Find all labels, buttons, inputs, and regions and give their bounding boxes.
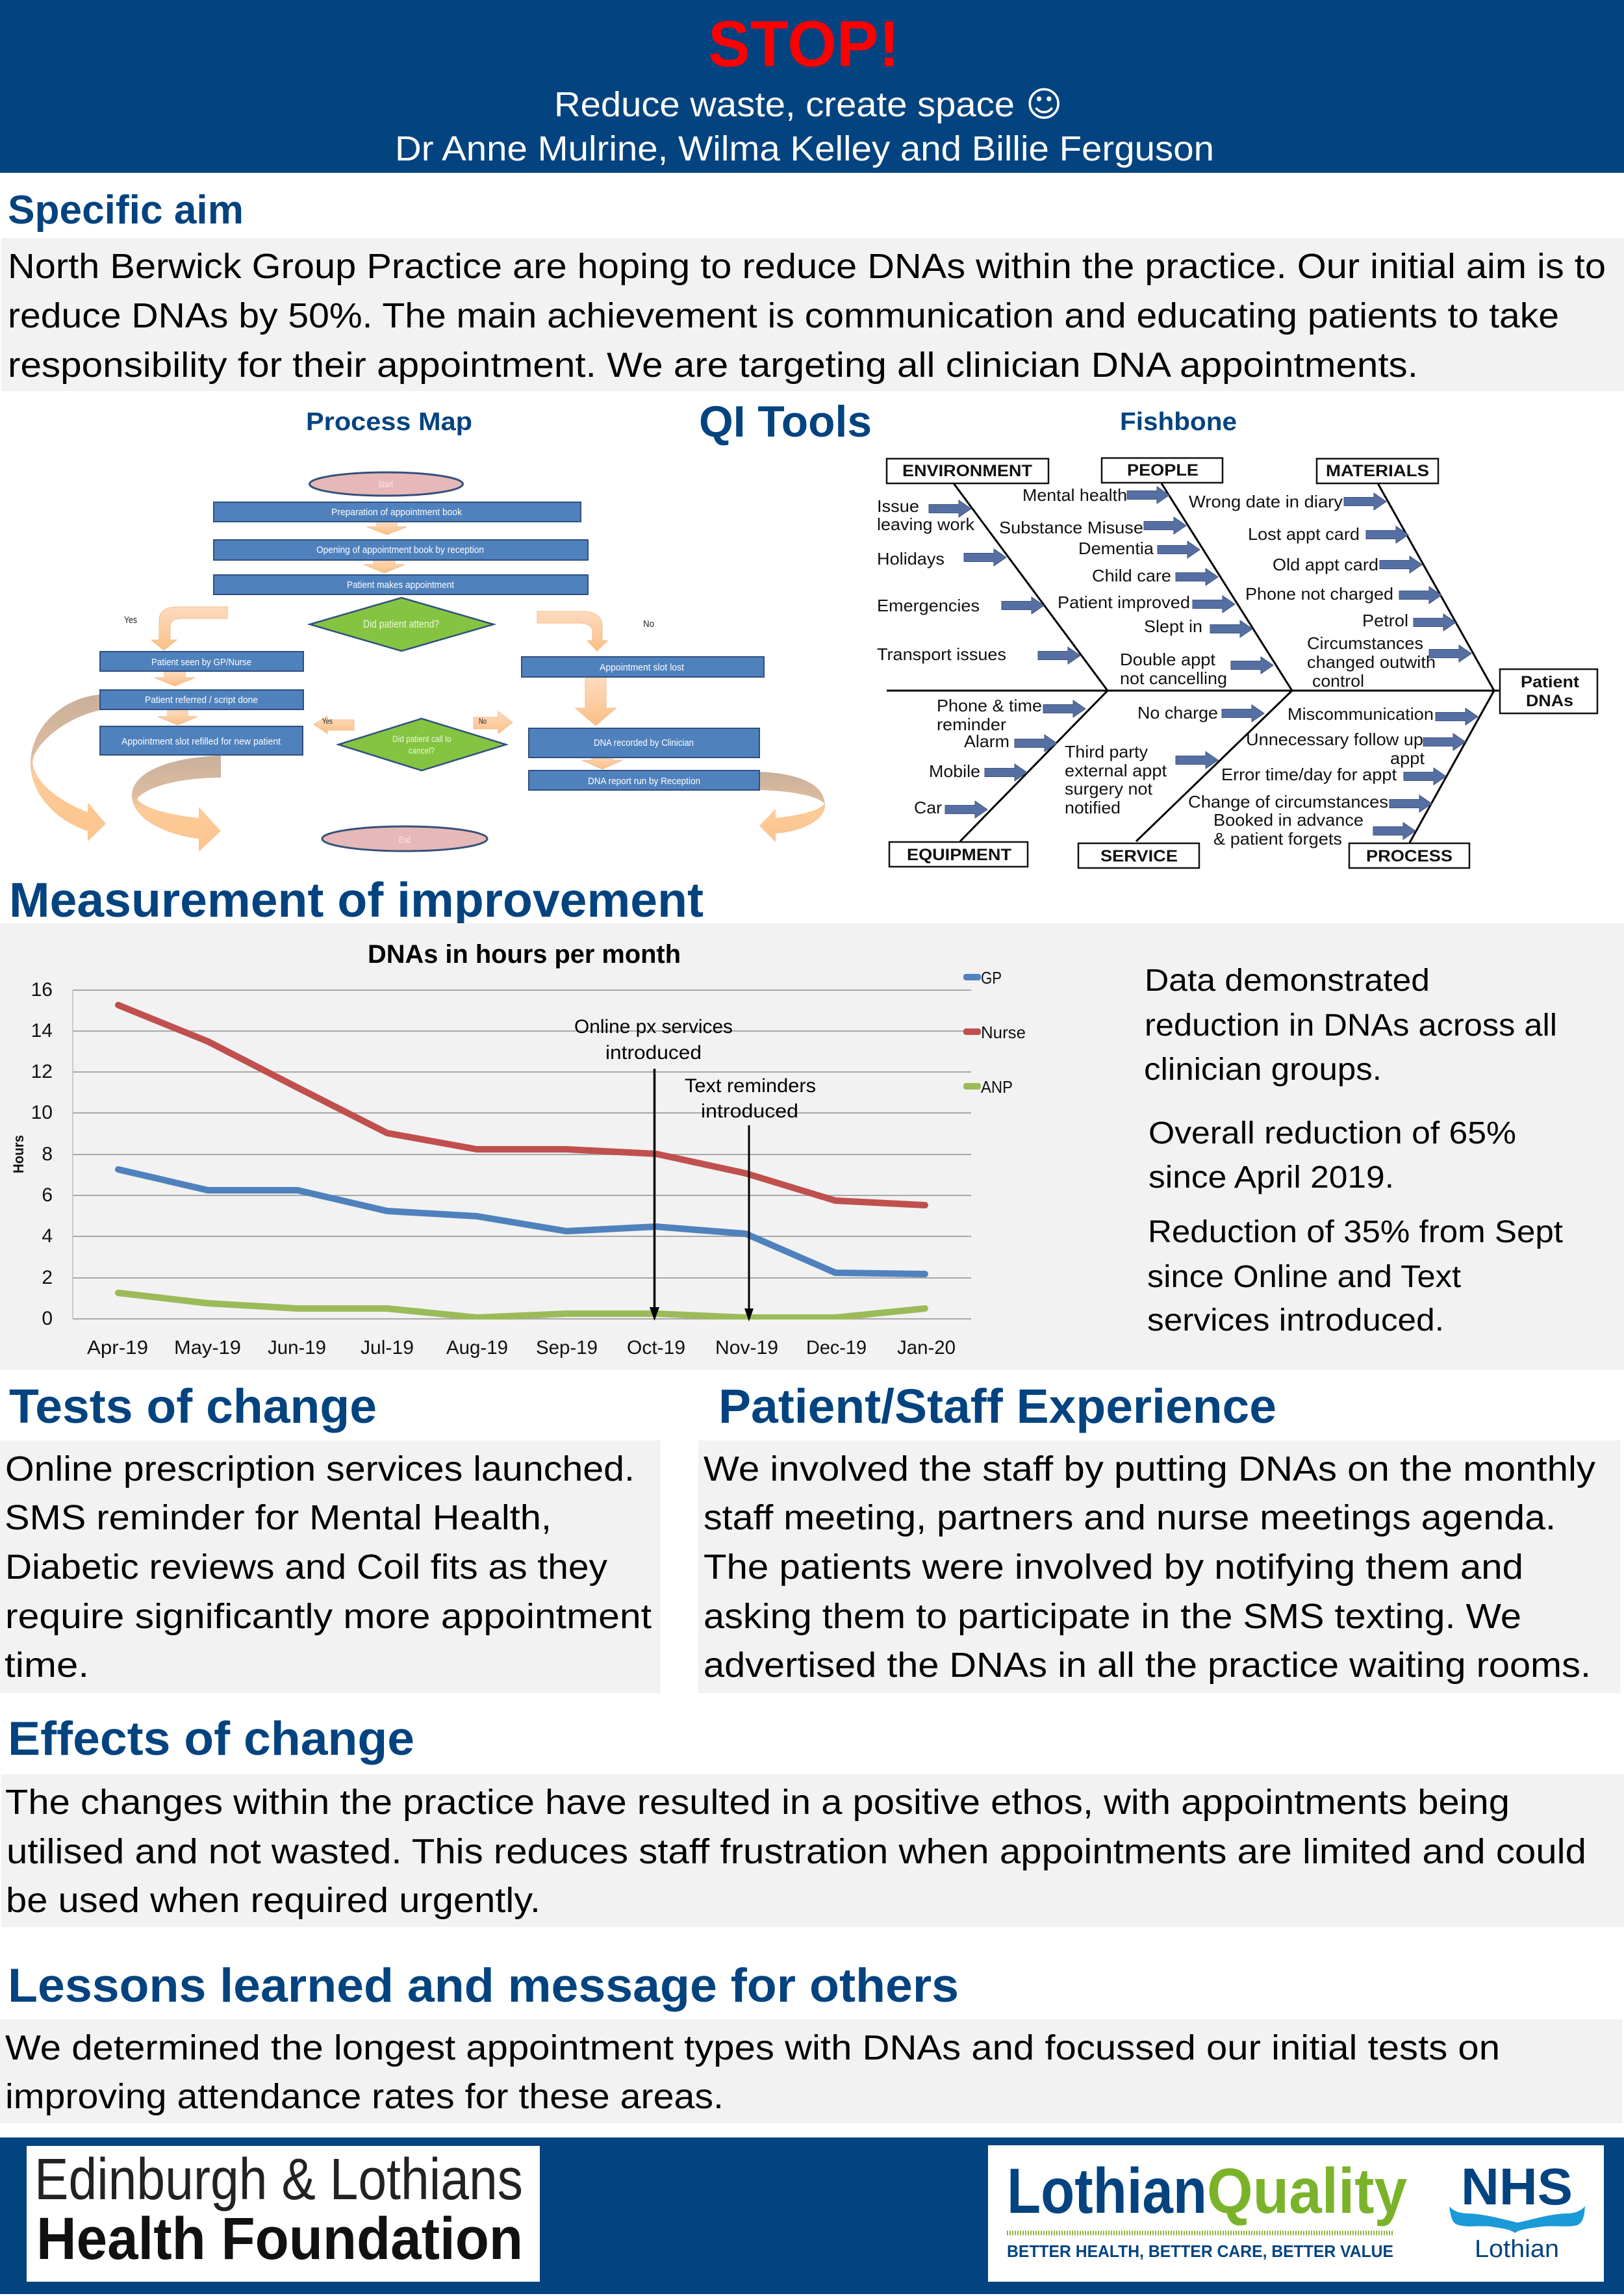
logo: Lothian Quality and NHS Lothian: Lothian — [1475, 2236, 1559, 2263]
legend — [963, 968, 1026, 1097]
cause labels: appt — [1390, 748, 1425, 768]
logo: Edinburgh & Lothians Health Foundation: Edinburgh & Lothians — [34, 2147, 523, 2212]
heading: patient/staff experience: Patient/Staff Experience — [718, 1379, 1276, 1433]
annotation: online px services: Online px services — [574, 1016, 733, 1038]
legend: Nurse — [981, 1023, 1026, 1042]
category boxes — [887, 458, 1597, 868]
cause labels: Substance Misuse — [999, 518, 1143, 537]
cause labels: Alarm — [964, 732, 1009, 751]
logo: Edinburgh & Lothians Health Foundation: Health Foundation — [36, 2206, 523, 2272]
panel: lessons learned: We determined the longest appointment types with DNAs and focussed our initial tests on — [5, 2028, 1500, 2067]
cause labels: leaving work — [877, 515, 975, 534]
measurement commentary: reduction in DNAs across all — [1145, 1008, 1557, 1043]
cause labels: Circumstances — [1307, 633, 1423, 653]
measurement commentary: Reduction of 35% from Sept — [1148, 1215, 1563, 1249]
authors: Dr Anne Mulrine, Wilma Kelley and Billie Ferguson — [395, 129, 1214, 168]
bones — [887, 483, 1500, 843]
logo: Lothian Quality and NHS Lothian: NHS — [1461, 2158, 1573, 2215]
chart title: DNAs in hours per month — [368, 940, 681, 969]
category boxes: SERVICE — [1100, 847, 1178, 865]
process boxes: DNA report run by Reception — [588, 776, 700, 787]
process boxes: Appointment slot lost — [600, 662, 685, 673]
logo: Lothian Quality and NHS Lothian: Lothian — [1007, 2155, 1207, 2226]
cause labels: Double appt — [1120, 650, 1216, 669]
logo: Lothian Quality and NHS Lothian: Quality — [1207, 2155, 1407, 2226]
cause labels: Unnecessary follow up — [1246, 730, 1423, 749]
measurement commentary — [1144, 963, 1563, 1338]
cause labels: No charge — [1137, 703, 1218, 722]
cause labels: Dementia — [1078, 539, 1154, 558]
panel: patient/staff experience: We involved the staff by putting DNAs on the monthly — [704, 1449, 1595, 1488]
category boxes: PROCESS — [1366, 847, 1453, 865]
decision diamonds: cancel? — [409, 745, 435, 756]
y axis labels — [31, 979, 53, 1329]
series lines — [118, 1005, 925, 1318]
process boxes: Patient makes appointment — [347, 580, 455, 591]
subtitle: ☺ — [1026, 84, 1062, 125]
cause labels: Car — [914, 798, 942, 817]
y axis labels: 10 — [31, 1102, 53, 1123]
start and end ovals: Start — [378, 479, 393, 489]
panel: tests of change: Diabetic reviews and Coil fits as they — [5, 1548, 607, 1587]
cause labels: Third party — [1065, 742, 1148, 761]
cause labels: surgery not — [1065, 779, 1153, 798]
cause labels: Wrong date in diary — [1189, 492, 1343, 511]
measurement commentary: since Online and Text — [1147, 1260, 1461, 1294]
decision diamonds — [310, 598, 506, 771]
category boxes: EQUIPMENT — [907, 846, 1011, 864]
x axis labels: Jun-19 — [268, 1337, 326, 1358]
panel: patient/staff experience — [698, 1440, 1621, 1693]
panel: tests of change: time. — [5, 1646, 89, 1685]
panel: specific aim: reduce DNAs by 50%. The main achievement is communication and educating patients to take — [8, 296, 1559, 335]
panel: specific aim: responsibility for their appointment. We are targeting all clinician DNA appointments. — [8, 346, 1418, 385]
x axis labels — [87, 1337, 956, 1358]
y axis labels: 2 — [42, 1267, 53, 1288]
logo: Edinburgh & Lothians Health Foundation — [27, 2146, 540, 2282]
header banner — [0, 0, 1624, 173]
process boxes: Patient referred / script done — [145, 695, 258, 706]
process boxes — [100, 502, 764, 790]
panel: effects of change: The changes within the practice have resulted in a positive ethos, with appointments being — [5, 1783, 1510, 1822]
cause labels — [877, 485, 1436, 848]
cause labels: Lost appt card — [1248, 524, 1360, 544]
cause labels: Patient improved — [1058, 593, 1190, 612]
title: STOP! — [708, 8, 900, 81]
line chart: DNAs in hours per month — [10, 940, 1026, 1358]
heading: effects of change: Effects of change — [8, 1713, 414, 1765]
legend: ANP — [981, 1077, 1013, 1097]
fishbone heading: Fishbone — [1120, 408, 1237, 436]
cause labels: changed outwith — [1307, 652, 1436, 672]
panel: effects of change: be used when required urgently. — [6, 1881, 540, 1920]
annotation: text reminders: Text reminders — [685, 1075, 816, 1097]
cause labels: Emergencies — [877, 596, 980, 615]
cause labels: Issue — [877, 496, 919, 516]
x axis labels: Oct-19 — [627, 1337, 685, 1358]
panel: tests of change: SMS reminder for Mental Health, — [5, 1498, 552, 1537]
yes and no labels: Yes — [124, 615, 137, 626]
category boxes: MATERIALS — [1326, 462, 1429, 480]
y axis labels: 14 — [31, 1020, 53, 1041]
category boxes: PEOPLE — [1127, 461, 1199, 479]
cause labels: Error time/day for appt — [1221, 765, 1397, 784]
x axis labels: Dec-19 — [806, 1337, 867, 1358]
cause labels: notified — [1065, 798, 1121, 817]
annotation: text reminders — [685, 1075, 816, 1321]
logo: Lothian Quality and NHS Lothian — [988, 2145, 1604, 2282]
process map heading: Process Map — [306, 408, 472, 436]
process boxes: DNA recorded by Clinician — [594, 737, 694, 748]
process boxes: Appointment slot refilled for new patient — [121, 736, 281, 747]
start and end ovals: End — [399, 834, 411, 845]
curved arrows — [31, 695, 825, 852]
x axis labels: Jan-20 — [897, 1337, 956, 1358]
heading: lessons learned: Lessons learned and message for others — [8, 1959, 959, 2012]
flow arrows — [151, 522, 622, 769]
panel: specific aim: North Berwick Group Practice are hoping to reduce DNAs within the practice. Our initial aim is to — [8, 247, 1606, 286]
panel: patient/staff experience: The patients were involved by notifying them and — [704, 1548, 1523, 1587]
cause labels: external appt — [1065, 761, 1167, 780]
decision diamonds: Did patient attend? — [363, 618, 439, 630]
panel: effects of change — [1, 1774, 1624, 1927]
y axis labels: 4 — [42, 1225, 53, 1247]
heading: specific aim: Specific aim — [8, 188, 244, 233]
cause labels: Petrol — [1362, 611, 1408, 630]
y axis labels: 6 — [42, 1184, 53, 1206]
fishbone diagram — [877, 408, 1597, 868]
yes and no labels: Yes — [322, 717, 333, 726]
legend: GP — [981, 968, 1002, 988]
panel: patient/staff experience: asking them to participate in the SMS texting. We — [704, 1597, 1521, 1636]
y axis labels: 0 — [42, 1308, 53, 1329]
measurement commentary: Data demonstrated — [1145, 963, 1430, 998]
category boxes: Patient — [1521, 673, 1580, 691]
panel: tests of change: Online prescription services launched. — [5, 1449, 635, 1488]
panel: effects of change: utilised and not wasted. This reduces staff frustration when appointments are limited and could — [6, 1832, 1586, 1871]
cause labels: reminder — [937, 715, 1006, 734]
panel: lessons learned — [0, 2019, 1622, 2123]
cause labels: Child care — [1092, 566, 1171, 585]
y axis labels: 16 — [31, 979, 53, 1001]
process boxes: Preparation of appointment book — [331, 507, 462, 518]
yes and no labels — [124, 615, 654, 726]
cause labels: Phone & time — [937, 696, 1042, 715]
heading: measurement of improvement: Measurement of improvement — [9, 873, 704, 927]
measurement commentary: since April 2019. — [1148, 1160, 1394, 1195]
heading: tests of change: Tests of change — [9, 1379, 377, 1433]
measurement commentary: Overall reduction of 65% — [1148, 1116, 1516, 1151]
decision diamonds: Did patient call to — [392, 733, 451, 744]
footer band — [0, 2137, 1624, 2294]
measurement commentary: clinician groups. — [1144, 1052, 1382, 1087]
cause labels: Mental health — [1022, 485, 1127, 505]
yes and no labels: No — [643, 619, 654, 630]
cause labels: Transport issues — [877, 644, 1006, 664]
cause labels: Miscommunication — [1288, 704, 1434, 724]
annotation: online px services: introduced — [605, 1042, 702, 1064]
x axis labels: Jul-19 — [361, 1337, 414, 1358]
cause labels: & patient forgets — [1213, 829, 1342, 848]
yes and no labels: No — [479, 717, 487, 726]
category boxes: DNAs — [1526, 692, 1573, 710]
logo: Lothian Quality and NHS Lothian: BETTER HEALTH, BETTER CARE, BETTER VALUE — [1007, 2241, 1393, 2261]
cause arrows — [929, 487, 1478, 839]
cause labels: not cancelling — [1120, 669, 1227, 688]
cause labels: Booked in advance — [1213, 810, 1364, 830]
cause labels: Phone not charged — [1245, 584, 1393, 604]
cause labels: Mobile — [929, 761, 980, 781]
category boxes: ENVIRONMENT — [902, 462, 1032, 480]
panel: measurement — [0, 923, 1624, 1370]
process boxes: Patient seen by GP/Nurse — [151, 657, 251, 668]
y axis labels: 12 — [31, 1061, 53, 1082]
panel: patient/staff experience: staff meeting, partners and nurse meetings agenda. — [704, 1498, 1556, 1537]
x axis labels: Sep-19 — [536, 1337, 598, 1358]
panel: patient/staff experience: advertised the DNAs in all the practice waiting rooms. — [704, 1646, 1591, 1685]
x axis labels: Nov-19 — [715, 1337, 778, 1358]
cause labels: Old appt card — [1273, 555, 1378, 574]
cause labels: Change of circumstances — [1188, 792, 1388, 811]
panel: lessons learned: improving attendance rates for these areas. — [5, 2077, 724, 2116]
cause labels: Holidays — [877, 549, 945, 568]
panel: tests of change — [0, 1440, 661, 1693]
measurement commentary: services introduced. — [1147, 1303, 1444, 1338]
x axis labels: Aug-19 — [446, 1337, 508, 1358]
y axis title: Hours — [10, 1135, 27, 1173]
panel: specific aim — [1, 238, 1624, 391]
cause labels: control — [1312, 671, 1364, 691]
x axis labels: May-19 — [174, 1337, 241, 1358]
subtitle: Reduce waste, create space — [554, 85, 1015, 124]
process map — [31, 408, 825, 852]
annotation: text reminders: introduced — [701, 1101, 798, 1122]
start and end ovals — [309, 472, 487, 851]
cause labels: Slept in — [1144, 617, 1202, 636]
heading: QI tools: QI Tools — [699, 397, 872, 446]
process boxes: Opening of appointment book by reception — [316, 544, 484, 555]
annotation: online px services — [574, 1016, 733, 1321]
panel: tests of change: require significantly more appointment — [5, 1597, 652, 1636]
x axis labels: Apr-19 — [87, 1337, 148, 1358]
y axis labels: 8 — [42, 1143, 53, 1165]
